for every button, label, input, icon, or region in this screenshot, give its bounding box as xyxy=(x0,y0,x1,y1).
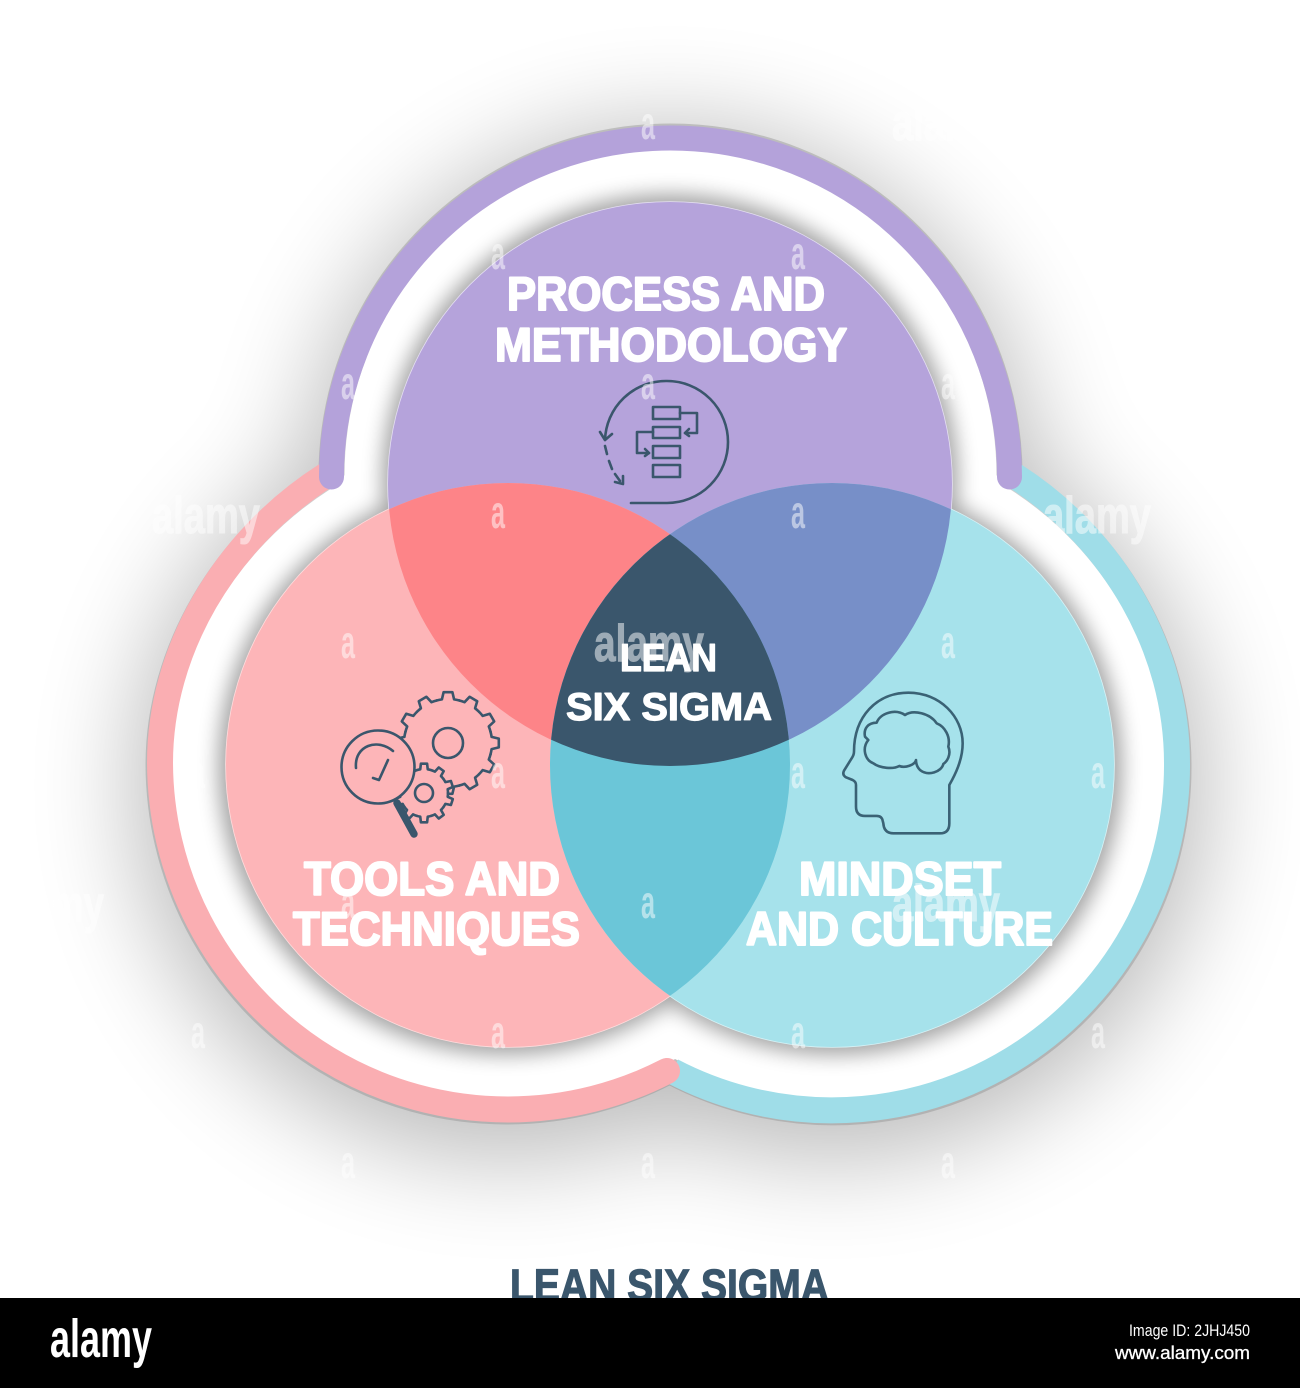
heading: center lean six sigma xyxy=(566,637,772,729)
watermarks: a xyxy=(191,746,205,798)
footer image id: Image ID: 2JHJ450 xyxy=(1129,1321,1250,1340)
watermarks: alamy xyxy=(594,615,704,673)
watermarks: a xyxy=(941,616,955,668)
watermarks: a xyxy=(941,1136,955,1188)
watermarks: a xyxy=(791,1006,805,1058)
overlap: process and mindset xyxy=(551,483,951,740)
watermarks: a xyxy=(341,876,355,928)
rim: purple xyxy=(332,138,1010,477)
watermarks xyxy=(0,94,1151,1188)
small gear xyxy=(394,764,454,822)
watermarks: a xyxy=(641,1136,655,1188)
watermarks: a xyxy=(491,746,505,798)
overlap: tools and mindset xyxy=(550,534,790,996)
heading: tools and techniques: TOOLS AND xyxy=(304,852,560,905)
heading: mindset and culture xyxy=(746,852,1053,955)
rim: teal xyxy=(672,476,1177,1110)
inner disc shadows on white ring xyxy=(218,194,1122,1055)
heading: center lean six sigma: SIX SIGMA xyxy=(566,686,772,729)
watermarks: a xyxy=(1091,746,1105,798)
footer bar xyxy=(0,1298,1300,1388)
heading: process and methodology: METHODOLOGY xyxy=(495,318,847,371)
watermarks: a xyxy=(641,97,655,149)
watermarks: a xyxy=(941,357,955,409)
watermarks: a xyxy=(791,227,805,279)
watermarks: a xyxy=(791,486,805,538)
magnifier xyxy=(342,730,414,834)
icon: process flow cycle xyxy=(600,381,728,503)
circle: tools and techniques xyxy=(226,483,790,1047)
watermarks: a xyxy=(491,486,505,538)
watermarks: a xyxy=(341,357,355,409)
watermarks: alamy xyxy=(1043,487,1151,545)
heading: mindset and culture: AND CULTURE xyxy=(746,902,1053,955)
overlap: center xyxy=(551,534,789,766)
watermarks: a xyxy=(341,1136,355,1188)
watermarks: a xyxy=(641,357,655,409)
heading: process and methodology: PROCESS AND xyxy=(507,267,825,320)
title: lean six sigma: LEAN SIX SIGMA xyxy=(510,1260,829,1311)
watermarks: alamy xyxy=(152,487,260,545)
heading: process and methodology xyxy=(495,267,847,371)
circle: mindset and culture xyxy=(550,483,1114,1047)
watermarks: a xyxy=(491,1006,505,1058)
footer logo: alamy xyxy=(50,1309,152,1369)
watermarks: alamy xyxy=(892,94,1000,152)
heading: center lean six sigma: LEAN xyxy=(620,637,717,680)
white base plate xyxy=(168,142,1167,1103)
watermarks: a xyxy=(191,1006,205,1058)
watermarks: a xyxy=(1091,1006,1105,1058)
watermarks: a xyxy=(791,746,805,798)
rim edge shadows xyxy=(158,137,1179,1112)
circle: process and methodology xyxy=(388,202,952,766)
soft background shadow xyxy=(136,128,1204,1157)
watermarks: alamy xyxy=(892,875,1000,933)
watermarks: a xyxy=(491,227,505,279)
venn circles xyxy=(225,201,1115,1048)
rim: pink xyxy=(160,476,667,1109)
heading: mindset and culture: MINDSET xyxy=(799,852,1001,905)
icon: head with brain xyxy=(843,693,963,833)
watermarks: alamy xyxy=(0,876,104,934)
overlap: process and tools xyxy=(389,483,670,740)
watermarks: a xyxy=(641,876,655,928)
heading: tools and techniques xyxy=(293,852,580,955)
icon: magnifier and gears xyxy=(342,692,499,834)
footer url: www.alamy.com xyxy=(1114,1343,1250,1363)
heading: tools and techniques: TECHNIQUES xyxy=(293,902,580,955)
light disc edges xyxy=(225,201,1115,1048)
watermarks: a xyxy=(341,616,355,668)
big gear xyxy=(397,692,499,794)
